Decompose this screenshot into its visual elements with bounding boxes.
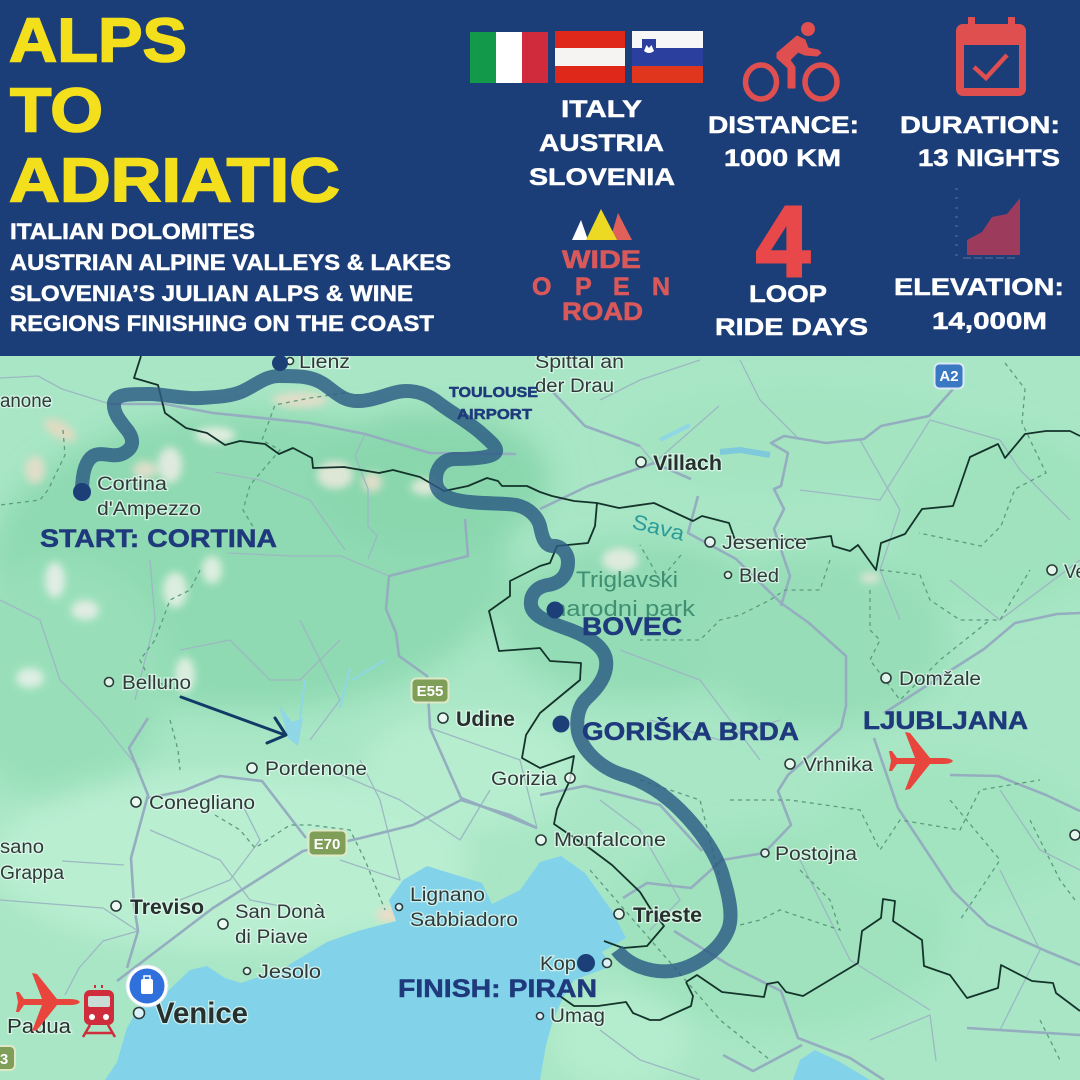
duration text: DURATION:	[900, 112, 1060, 139]
place names: der Drau	[535, 376, 614, 397]
place names: Umag	[550, 1006, 605, 1027]
countries text: SLOVENIA	[529, 164, 675, 191]
elevation text: 14,000M	[932, 308, 1047, 335]
flag: Slovenia	[632, 31, 703, 83]
logo: Wide Open Road: ROAD	[562, 298, 643, 326]
title	[9, 6, 340, 216]
description text: ITALIAN DOLOMITES	[10, 219, 255, 244]
road shields	[0, 364, 964, 1070]
loop ride days text	[715, 281, 868, 341]
description text: SLOVENIA’S JULIAN ALPS & WINE	[10, 281, 413, 306]
town markers	[104, 358, 1080, 1020]
place names: Postojna	[775, 844, 857, 865]
place names: Triglavski	[576, 567, 678, 592]
place names: Domžale	[899, 669, 981, 690]
place names: Grappa	[0, 863, 64, 884]
place names: Conegliano	[149, 793, 255, 814]
lakes and rivers	[279, 425, 770, 746]
place names: anone	[0, 391, 52, 412]
place names: di Piave	[235, 927, 308, 948]
description text	[10, 219, 451, 336]
international borders	[134, 356, 1080, 1020]
place names: Villach	[653, 452, 722, 475]
gulf of Rijeka	[793, 1050, 870, 1080]
title: ALPS	[9, 6, 187, 76]
flag: Austria	[555, 31, 625, 83]
terrain shading	[0, 390, 1080, 1080]
description text: AUSTRIAN ALPINE VALLEYS & LAKES	[10, 250, 451, 275]
shield: E70: E70	[314, 836, 340, 853]
place names: Lignano	[410, 885, 485, 906]
place names: d'Ampezzo	[97, 499, 201, 520]
icon: cyclist	[746, 22, 837, 99]
place names: sano	[0, 837, 44, 858]
distance text: DISTANCE:	[708, 112, 859, 139]
elevation chart	[955, 189, 1020, 258]
shield: A2: A2	[939, 368, 959, 385]
place names: Spittal an	[535, 352, 624, 373]
minor roads	[0, 360, 1080, 1080]
title: TO	[10, 76, 103, 146]
place names: Bled	[739, 566, 779, 587]
icon: plane Ljubljana	[889, 732, 953, 790]
route labels: BOVEC	[582, 613, 682, 641]
place names: Sabbiadoro	[410, 910, 518, 931]
route stop markers	[73, 355, 595, 972]
shield: partial	[0, 1046, 15, 1070]
icon: plane Venice	[16, 973, 80, 1031]
route labels: AIRPORT	[457, 406, 532, 423]
sea	[105, 856, 626, 1080]
shield: A2	[934, 364, 964, 388]
place names: Monfalcone	[554, 830, 666, 851]
place names: Cortina	[97, 474, 167, 495]
elevation text: ELEVATION:	[894, 274, 1064, 301]
countries text	[529, 96, 675, 191]
place names: Vrhnika	[803, 755, 873, 776]
route labels: GORIŠKA BRDA	[582, 716, 799, 746]
elevation text	[894, 274, 1064, 335]
route labels: LJUBLJANA	[863, 707, 1028, 735]
logo: Wide Open Road: OPEN	[532, 273, 670, 301]
flag: Italy	[470, 32, 548, 83]
shield: E55	[412, 678, 448, 702]
icon: luggage pin	[126, 965, 168, 1007]
route labels	[40, 384, 1028, 1003]
route labels: START: CORTINA	[40, 525, 277, 553]
countries text: AUSTRIA	[539, 130, 664, 157]
header panel	[0, 0, 1080, 356]
distance text	[708, 112, 859, 172]
place names: Kop	[540, 954, 576, 975]
route labels: TOULOUSE	[449, 384, 538, 401]
route labels: FINISH: PIRAN	[398, 975, 597, 1003]
map panel	[0, 352, 1080, 1080]
loop ride days text: LOOP	[749, 281, 827, 308]
place names: Pordenone	[265, 759, 367, 780]
big number 4: 4	[756, 186, 810, 298]
icon: train	[83, 985, 115, 1037]
shield: E70	[308, 830, 346, 856]
cycling route	[82, 376, 731, 971]
main roads	[110, 389, 1080, 1080]
place names: Treviso	[130, 896, 204, 919]
dashed regional boundaries	[0, 363, 1075, 1060]
place names: Gorizia	[491, 769, 557, 790]
place names: narodni park	[552, 596, 696, 621]
place names: Sava	[630, 511, 687, 546]
distance text: 1000 KM	[724, 145, 841, 172]
place names: Lienz	[299, 352, 350, 373]
loop ride days text: RIDE DAYS	[715, 314, 868, 341]
shield: E55: E55	[417, 683, 443, 700]
logo: Wide Open Road	[532, 209, 670, 326]
arrow: to lake	[181, 697, 286, 743]
icon: calendar	[956, 17, 1026, 96]
place names: Jesolo	[258, 962, 321, 983]
place names: San Donà	[235, 902, 325, 923]
duration text	[900, 112, 1060, 172]
place names	[0, 352, 1080, 1038]
duration text: 13 NIGHTS	[918, 145, 1060, 172]
snow and rock patches	[16, 392, 880, 923]
place names: Padua	[7, 1016, 72, 1038]
place names: Jesenice	[722, 533, 807, 554]
shield: partial: 3	[0, 1051, 8, 1068]
place names: Venice	[155, 997, 248, 1030]
place names: Trieste	[633, 904, 702, 927]
logo: Wide Open Road: WIDE	[562, 246, 641, 274]
place names: Belluno	[122, 673, 191, 694]
description text: REGIONS FINISHING ON THE COAST	[10, 311, 435, 336]
place names: Udine	[456, 708, 515, 731]
countries text: ITALY	[561, 96, 642, 123]
title: ADRIATIC	[9, 146, 340, 216]
